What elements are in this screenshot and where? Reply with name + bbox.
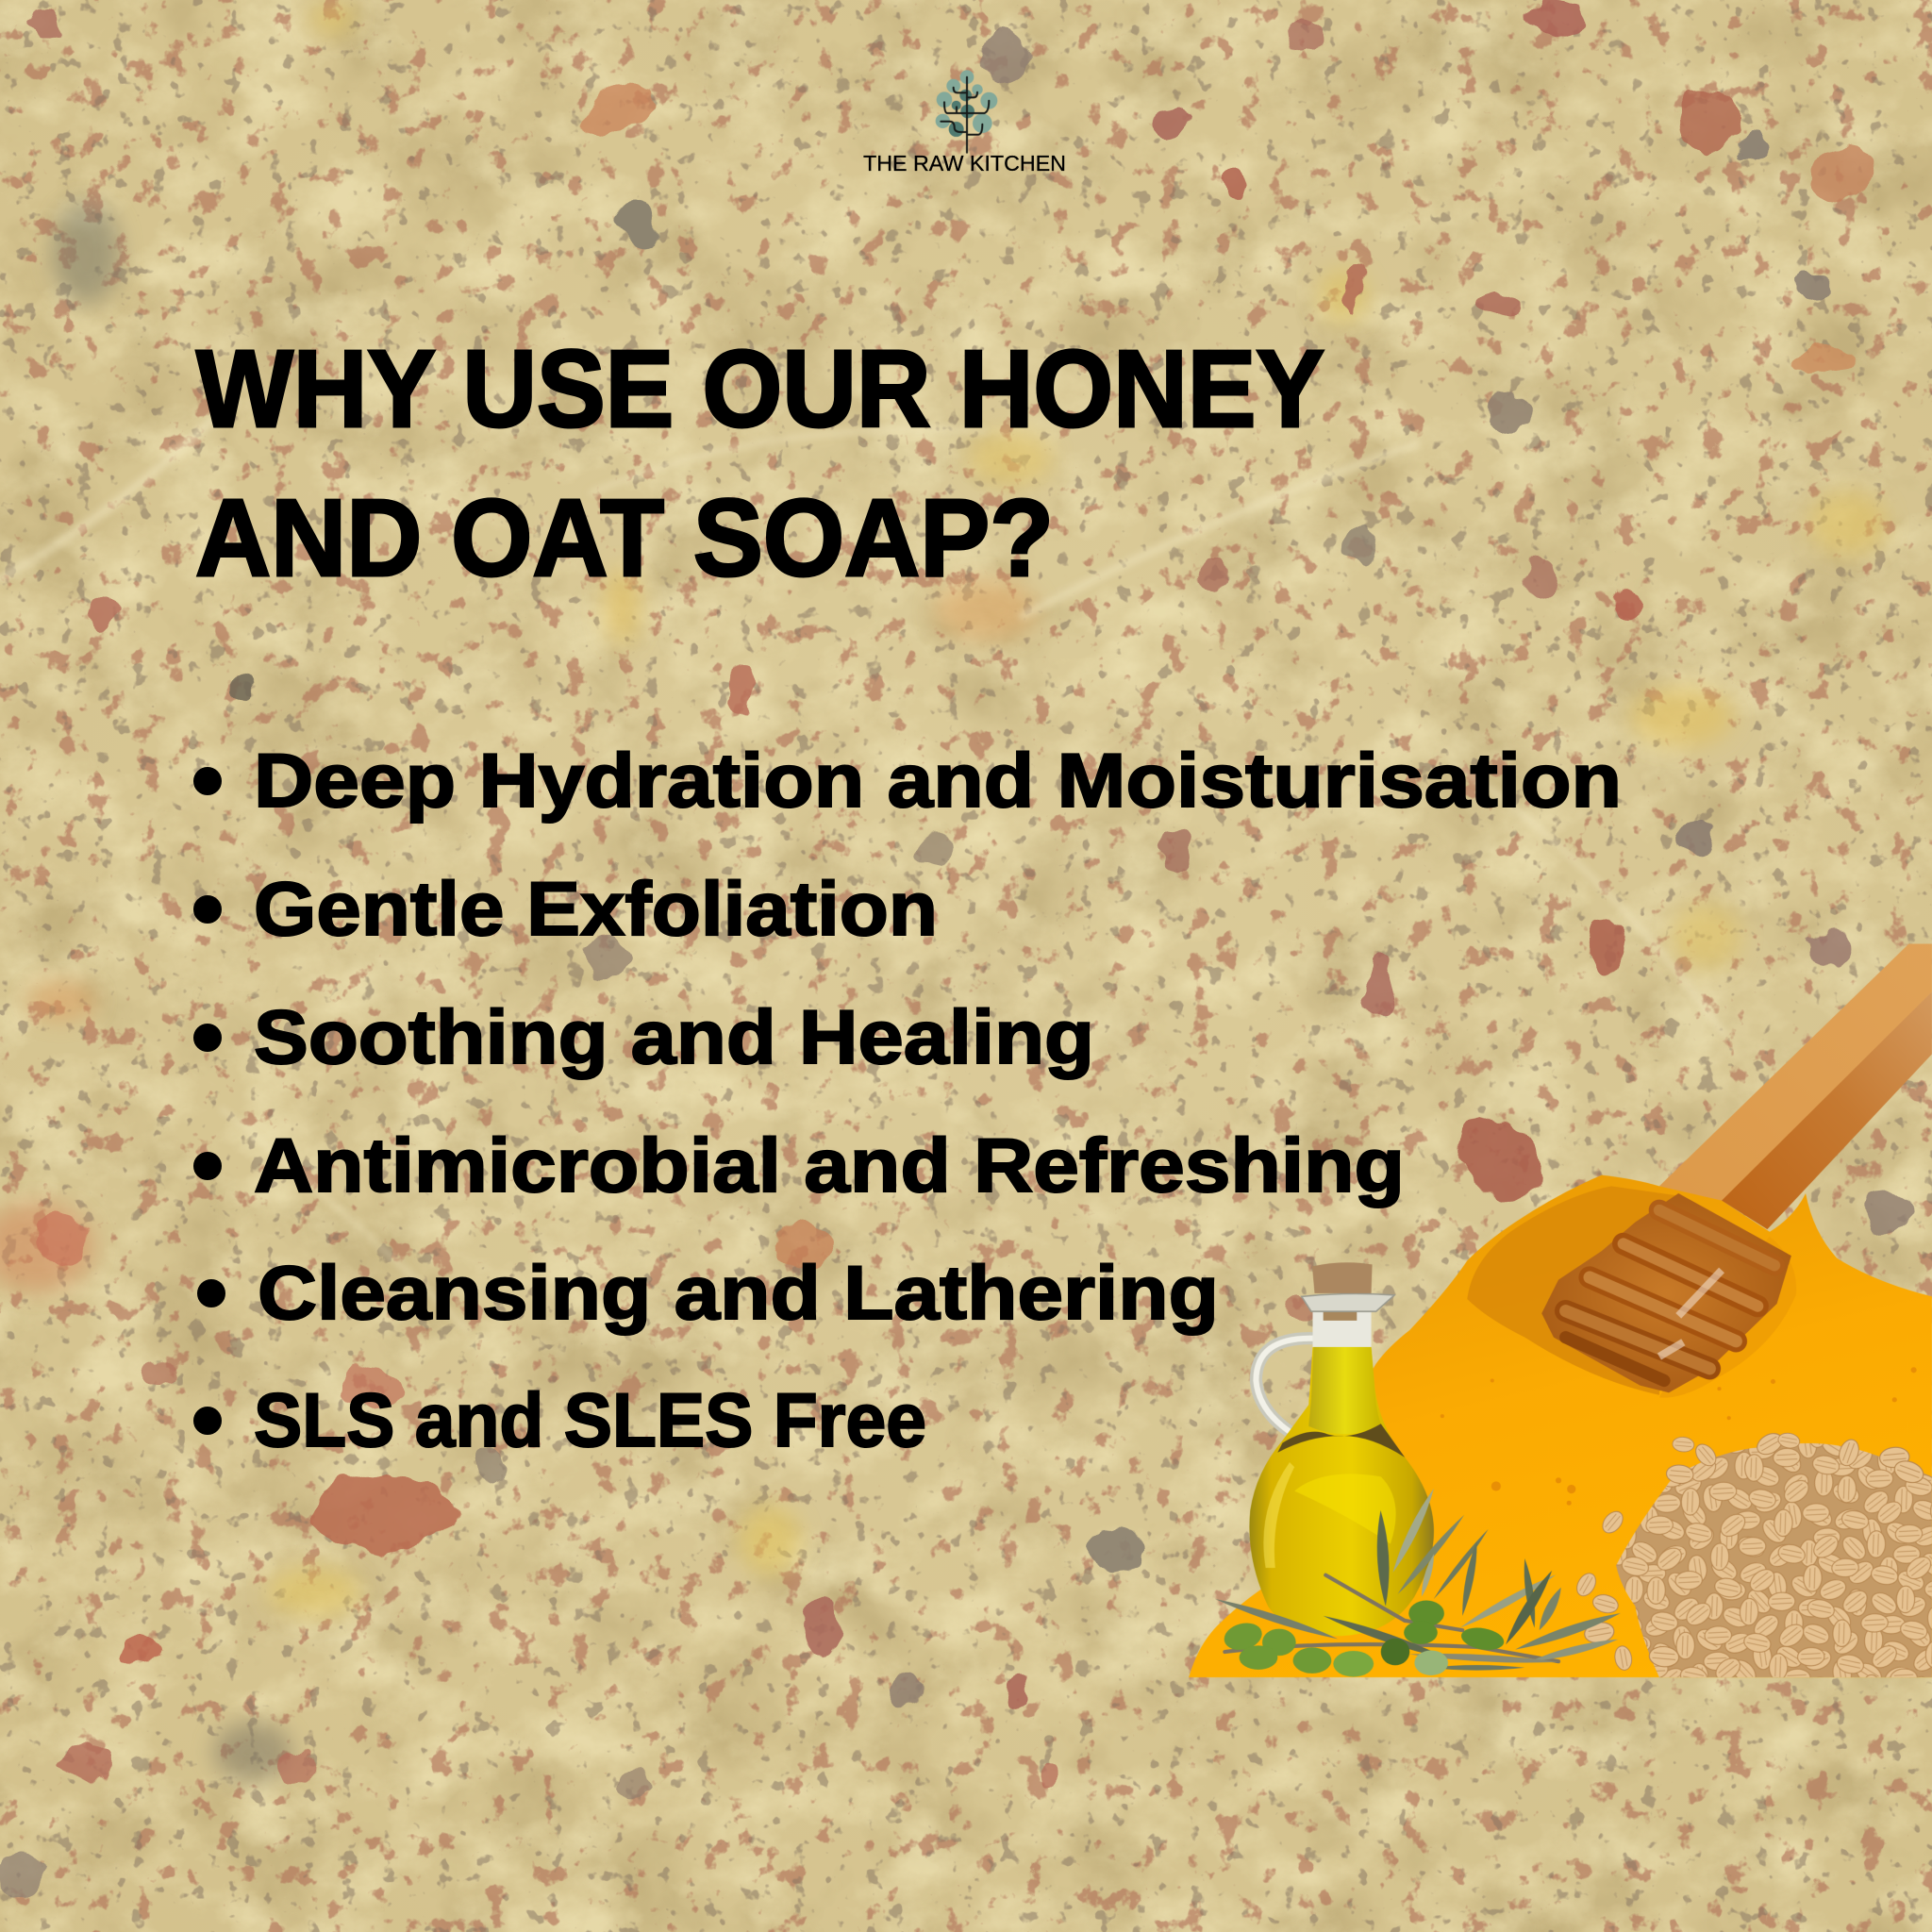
stems	[1224, 1575, 1558, 1661]
honey bubbles	[1441, 1367, 1917, 1506]
bottle neck glass	[1312, 1304, 1372, 1348]
honey puddle	[1189, 1175, 1932, 1677]
oats pile	[1574, 1429, 1932, 1677]
dipper cast shadow	[1659, 943, 1932, 1208]
olives	[1221, 1601, 1506, 1676]
bottle handle	[1256, 1339, 1312, 1431]
title: AND OAT SOAP?	[195, 476, 1054, 599]
icon: tree	[936, 70, 997, 153]
benefits list	[194, 739, 1622, 1463]
illustration: honey, dipper, oil bottle, olives and oats	[1189, 943, 1932, 1677]
list item: deep hydration: Deep Hydration and Moisturisation	[254, 739, 1622, 824]
bottle rim	[1302, 1293, 1394, 1311]
list item: antimicrobial and refreshing: Antimicrobial and Refreshing	[254, 1124, 1405, 1208]
title: WHY USE OUR HONEY	[196, 327, 1324, 450]
honey dipper	[1541, 991, 1932, 1392]
olive leaves	[1214, 1487, 1622, 1671]
cork	[1312, 1262, 1373, 1293]
dipper handle	[1722, 991, 1932, 1229]
dipper head	[1541, 1193, 1791, 1392]
olive branch	[1214, 1487, 1622, 1676]
honey shaded hollow	[1467, 1186, 1678, 1395]
title	[195, 327, 1324, 599]
list item: sls and sles free: SLS and SLES Free	[254, 1378, 926, 1463]
oil bottle	[1249, 1262, 1434, 1636]
bottle body with oil	[1249, 1347, 1434, 1636]
logo wordmark: THE RAW KITCHEN	[863, 151, 1066, 175]
logo: The Raw Kitchen	[863, 70, 1066, 175]
list item: cleansing and lathering: Cleansing and Lathering	[258, 1251, 1219, 1336]
list item: soothing and healing: Soothing and Healing	[254, 995, 1094, 1080]
list item: gentle exfoliation: Gentle Exfoliation	[254, 867, 938, 952]
